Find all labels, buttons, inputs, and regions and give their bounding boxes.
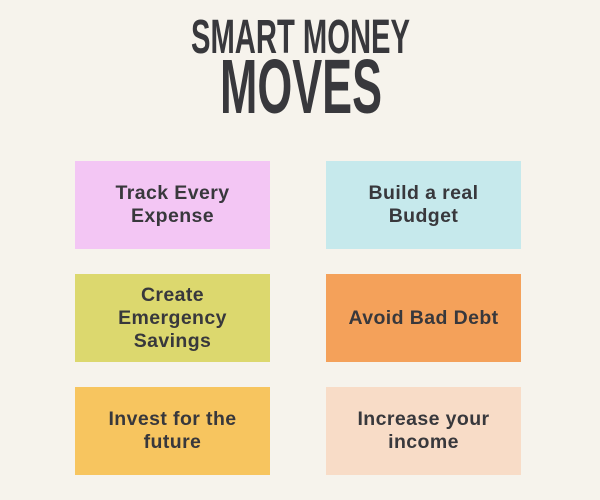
title line 2: MOVES bbox=[220, 44, 382, 130]
panel: invest for the future: future bbox=[144, 431, 201, 453]
panel: build a real budget: Build a real bbox=[369, 182, 478, 204]
panel: build a real budget bbox=[326, 161, 521, 249]
panel: track every expense: Track Every bbox=[116, 182, 229, 204]
panel: increase your income bbox=[326, 387, 521, 475]
panel: create emergency savings bbox=[75, 274, 270, 362]
title bbox=[191, 11, 410, 130]
panel: avoid bad debt bbox=[326, 274, 521, 362]
panel: build a real budget: Budget bbox=[389, 205, 458, 227]
panel: create emergency savings: Savings bbox=[134, 330, 211, 352]
panel: invest for the future bbox=[75, 387, 270, 475]
title line 1: SMART MONEY bbox=[191, 11, 410, 64]
panel: track every expense: Expense bbox=[131, 205, 214, 227]
panel: create emergency savings: Create bbox=[141, 284, 204, 306]
panel: avoid bad debt: Avoid Bad Debt bbox=[348, 306, 499, 328]
panel: track every expense bbox=[75, 161, 270, 249]
panel: create emergency savings: Emergency bbox=[118, 306, 227, 328]
panel: increase your income: Increase your bbox=[357, 408, 490, 430]
panel: invest for the future: Invest for the bbox=[108, 408, 237, 430]
panel: increase your income: income bbox=[388, 431, 459, 453]
